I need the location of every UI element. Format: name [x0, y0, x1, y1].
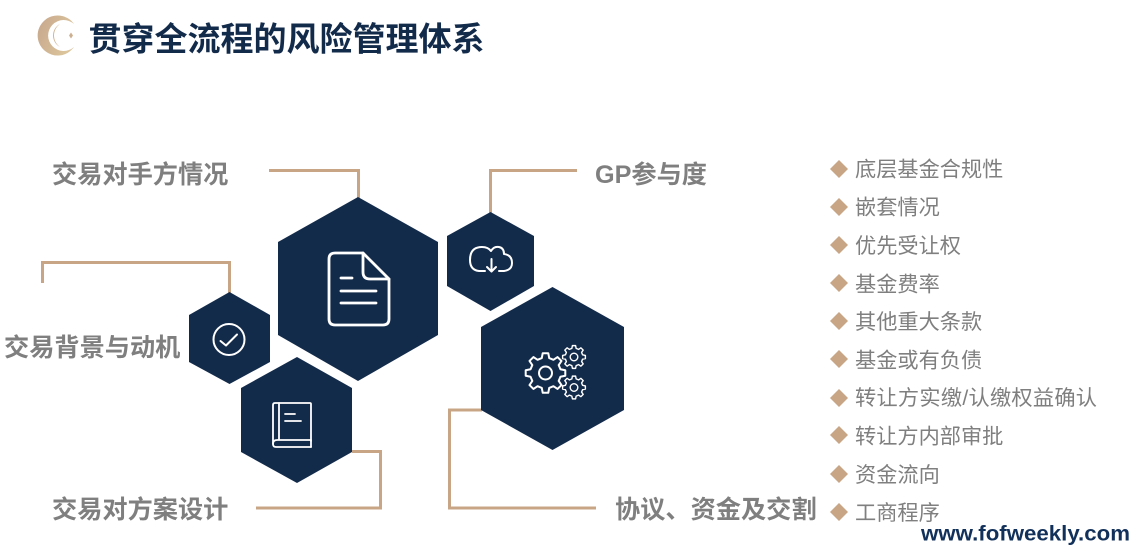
bullet item 5: 其他重大条款 [855, 310, 982, 334]
connector: agreement [450, 410, 596, 508]
hexagon: check [189, 292, 270, 384]
connector: GP [490, 170, 577, 213]
bullet item 8: 转让方内部审批 [855, 424, 1003, 448]
hexagon: cloud [447, 212, 534, 311]
icon: check circle [214, 324, 244, 355]
label: GP participation: GP参与度 [595, 160, 707, 189]
hexagon: book [241, 357, 352, 483]
watermark: website: www.fofweekly.com [920, 522, 1130, 545]
title: 贯穿全流程的风险管理体系 [88, 20, 484, 58]
icon: document [329, 253, 389, 325]
bullet item 7: 转让方实缴/认缴权益确认 [855, 386, 1097, 410]
bullet item 9: 资金流向 [855, 463, 940, 487]
bullet item 1: 底层基金合规性 [855, 158, 1003, 182]
bullet item 6: 基金或有负债 [855, 348, 982, 372]
connector: counterparty [269, 170, 358, 198]
checklist [830, 158, 1097, 525]
hexagon: document [278, 197, 438, 381]
label: counterparty: 交易对手方情况 [52, 160, 228, 189]
hexagon: gears [481, 287, 624, 450]
bullet item 2: 嵌套情况 [855, 196, 940, 220]
bullet item 4: 基金费率 [855, 272, 940, 296]
bullet item 3: 优先受让权 [855, 234, 961, 258]
label: plan design: 交易对方案设计 [52, 495, 228, 524]
icon: gears [526, 346, 585, 399]
connector: plan [256, 452, 380, 508]
icon: cloud download [470, 247, 512, 272]
label: agreement, funds and delivery: 协议、资金及交割 [615, 496, 816, 524]
icon: book [273, 403, 311, 447]
icon: logo [38, 16, 74, 56]
label: background and motivation: 交易背景与动机 [4, 334, 180, 362]
bullet item 10: 工商程序 [855, 501, 940, 525]
connector: background [42, 262, 230, 293]
